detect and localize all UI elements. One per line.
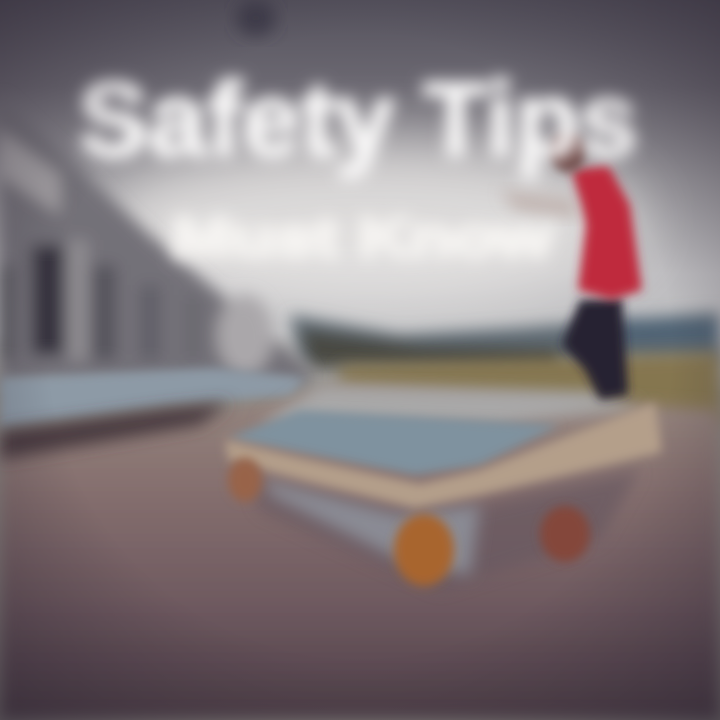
subtitle: Must Know [172,208,553,268]
top emblem [236,0,276,36]
wheel: right [540,506,590,562]
board shadow [250,470,640,590]
arm [500,190,578,218]
skater [500,132,642,400]
field [340,352,720,425]
wheel: front [394,514,454,586]
pale cloud glow [100,140,640,310]
building ledge [0,368,305,428]
red shirt [572,165,642,300]
board pale top surface [260,385,640,425]
wheel: back [228,458,262,502]
board underside [265,480,480,575]
distant treeline and hills [290,312,720,372]
title: Safety Tips [78,61,638,179]
skateboard [225,385,662,590]
ground [0,385,720,720]
ledge shadow [0,402,230,460]
board tan edge [225,402,662,508]
board top surface [228,410,560,475]
head [550,132,586,172]
building on the left [0,95,310,385]
legs [562,298,628,400]
